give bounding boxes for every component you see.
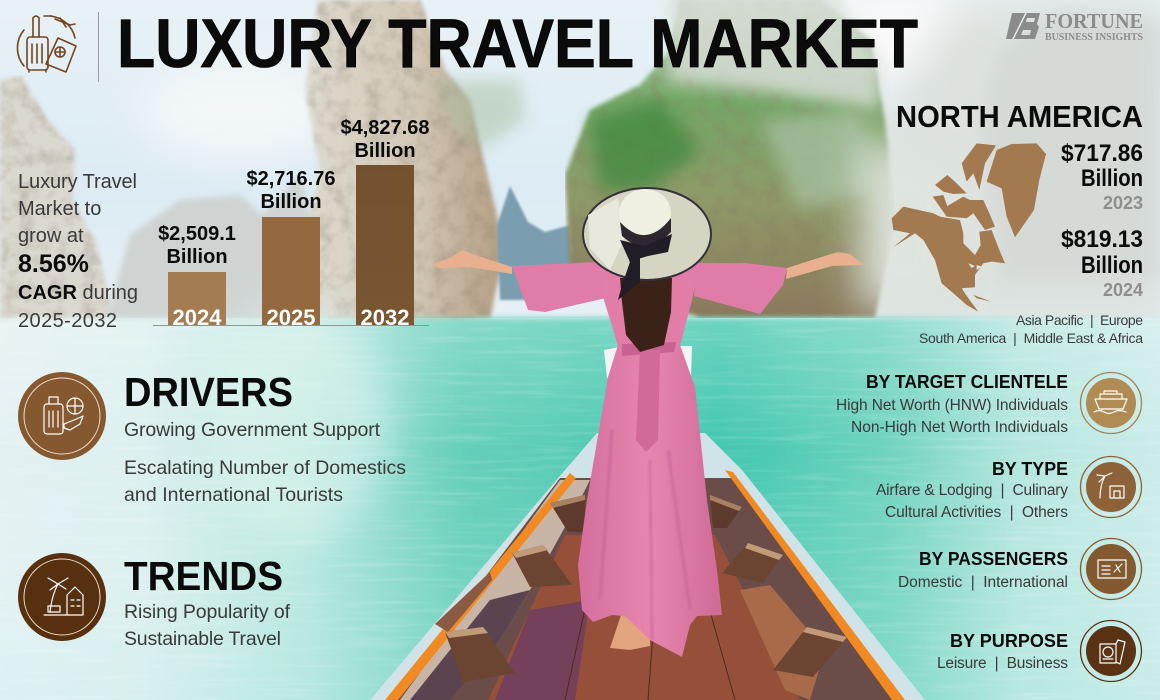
pink dress bbox=[578, 345, 722, 657]
heading: TRENDS bbox=[124, 553, 283, 599]
panel: trends bbox=[18, 553, 291, 650]
woman in pink dress and sun hat bbox=[432, 188, 864, 657]
bar 2025 bbox=[247, 168, 335, 330]
CAGR text block: 2025-2032 bbox=[18, 310, 117, 332]
sleeves bbox=[512, 262, 787, 314]
driver text: Growing Government Support bbox=[124, 419, 381, 441]
icon: luggage, plane and passport bbox=[17, 16, 76, 72]
title: LUXURY TRAVEL MARKET bbox=[117, 5, 918, 82]
panel: drivers bbox=[18, 369, 406, 506]
other regions: South America | Middle East & Africa bbox=[919, 330, 1143, 346]
segment: by type: Airfare & Lodging | Culinary bbox=[876, 482, 1068, 499]
value 2024: 2024 bbox=[1103, 280, 1143, 300]
CAGR text block: 8.56% bbox=[18, 250, 89, 278]
other regions: Asia Pacific | Europe bbox=[1016, 312, 1143, 328]
map: North America bbox=[892, 143, 1046, 312]
driver text: Escalating Number of Domestics bbox=[124, 457, 406, 479]
CAGR text block: grow at bbox=[18, 225, 84, 247]
driver text: and International Tourists bbox=[124, 484, 343, 506]
segment: by target clientele bbox=[836, 372, 1142, 436]
hair bbox=[620, 278, 672, 352]
bar 2032: $4,827.68 bbox=[341, 117, 429, 139]
icon: palm and hotel bbox=[18, 553, 106, 641]
value 2023: 2023 bbox=[1103, 193, 1143, 213]
segment: by purpose: BY PURPOSE bbox=[950, 631, 1068, 651]
segment: by passengers: Domestic | International bbox=[898, 574, 1068, 591]
bar chart: market size bbox=[153, 117, 429, 330]
bar 2032: Billion bbox=[354, 140, 416, 162]
value 2023: $717.86 bbox=[1061, 140, 1143, 167]
bar 2025: Billion bbox=[260, 191, 322, 213]
trend text bbox=[124, 601, 291, 650]
value 2024: $819.13 bbox=[1061, 226, 1143, 253]
bar 2032: 2032 bbox=[361, 305, 409, 330]
bar 2032 bbox=[341, 117, 429, 330]
trend text: Sustainable Travel bbox=[124, 628, 281, 650]
vertical divider bbox=[98, 12, 99, 82]
brand logo: Fortune Business Insights: FORTUNE bbox=[1045, 9, 1143, 33]
CAGR text block: CAGR during bbox=[18, 282, 138, 304]
segment: by type: BY TYPE bbox=[992, 459, 1068, 479]
driver text bbox=[124, 419, 406, 506]
heading: DRIVERS bbox=[124, 369, 293, 415]
sun hat bbox=[583, 188, 711, 280]
segment: by target clientele: BY TARGET CLIENTELE bbox=[866, 372, 1068, 392]
thwart blocks bbox=[445, 495, 847, 682]
segment: by purpose bbox=[937, 620, 1142, 682]
bar 2024: $2,509.1 bbox=[158, 223, 236, 245]
value 2023 bbox=[1061, 140, 1143, 213]
panel: North America bbox=[892, 99, 1143, 346]
brand logo: Fortune Business Insights bbox=[1006, 9, 1143, 43]
bar 2024: 2024 bbox=[173, 305, 222, 330]
feet bbox=[610, 612, 650, 650]
icon: cruise ship bbox=[1080, 372, 1142, 434]
icon: palm and resort bbox=[1080, 456, 1142, 518]
title block bbox=[17, 5, 918, 82]
other regions bbox=[919, 312, 1143, 346]
icon: passport bbox=[1080, 620, 1142, 682]
bar 2025: $2,716.76 bbox=[247, 168, 335, 190]
hat bow and ribbon bbox=[618, 234, 672, 300]
trend text: Rising Popularity of bbox=[124, 601, 291, 623]
bar 2024 bbox=[158, 223, 236, 330]
CAGR text block: Luxury Travel bbox=[18, 171, 137, 193]
CAGR text block bbox=[18, 171, 138, 332]
segment: by target clientele: High Net Worth (HNW) Individuals bbox=[836, 397, 1068, 414]
value 2024 bbox=[1061, 226, 1143, 300]
icon: ticket bbox=[1080, 538, 1142, 600]
segment: by target clientele: Non-High Net Worth Individuals bbox=[851, 419, 1068, 436]
brand logo: Fortune Business Insights: BUSINESS INSIGHTS bbox=[1045, 32, 1143, 43]
CAGR text block: Market to bbox=[18, 198, 101, 220]
heading: NORTH AMERICA bbox=[896, 99, 1143, 134]
value 2023: Billion bbox=[1081, 165, 1143, 192]
icon: luggage and globe bbox=[18, 372, 106, 460]
value 2024: Billion bbox=[1081, 252, 1143, 279]
bar 2024: Billion bbox=[166, 246, 228, 268]
segment: by type bbox=[876, 456, 1142, 521]
segment: by purpose: Leisure | Business bbox=[937, 655, 1068, 672]
bar 2025: 2025 bbox=[267, 305, 315, 330]
segment: by passengers: BY PASSENGERS bbox=[919, 549, 1068, 569]
segment: by type: Cultural Activities | Others bbox=[885, 504, 1068, 521]
segment: by passengers bbox=[898, 538, 1142, 600]
arms bbox=[432, 250, 864, 279]
boat bbox=[370, 433, 925, 700]
